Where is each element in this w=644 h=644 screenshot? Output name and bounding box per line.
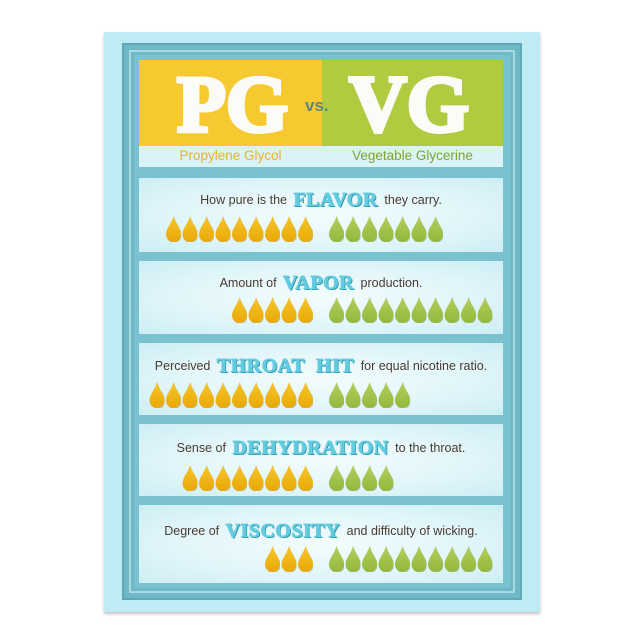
subtitle strip [139,146,503,167]
text: dehydration: Sense of DEHYDRATION to the throat. [177,437,465,459]
text: flavor: How pure is the FLAVOR they carry. [200,189,442,211]
header: PG vs VG [139,60,503,167]
drops: flavor [166,216,443,242]
subtitle PG: Propylene Glycol [179,148,282,163]
drops: dehydration [182,465,394,491]
panel: viscosity [139,505,503,583]
vs label: vs. [305,96,329,115]
panel: dehydration [139,424,503,496]
panel: vapor [139,261,503,334]
VG block [322,60,503,146]
PG block [139,60,322,146]
drops: throat hit [150,382,410,408]
drops: vapor [232,297,492,323]
panel: flavor [139,178,503,252]
drops: viscosity [265,546,492,572]
panel: throat hit [139,343,503,415]
PG letters: PG [177,61,288,149]
VG letters: VG [349,61,469,149]
subtitle VG: Vegetable Glycerine [352,148,473,163]
teal frame [122,43,522,600]
text: vapor: Amount of VAPOR production. [220,272,422,294]
text: viscosity: Degree of VISCOSITY and difficulty of wicking. [164,520,478,542]
card background [104,32,540,612]
text: throat hit: Perceived THROAT HIT for equal nicotine ratio. [155,355,487,377]
